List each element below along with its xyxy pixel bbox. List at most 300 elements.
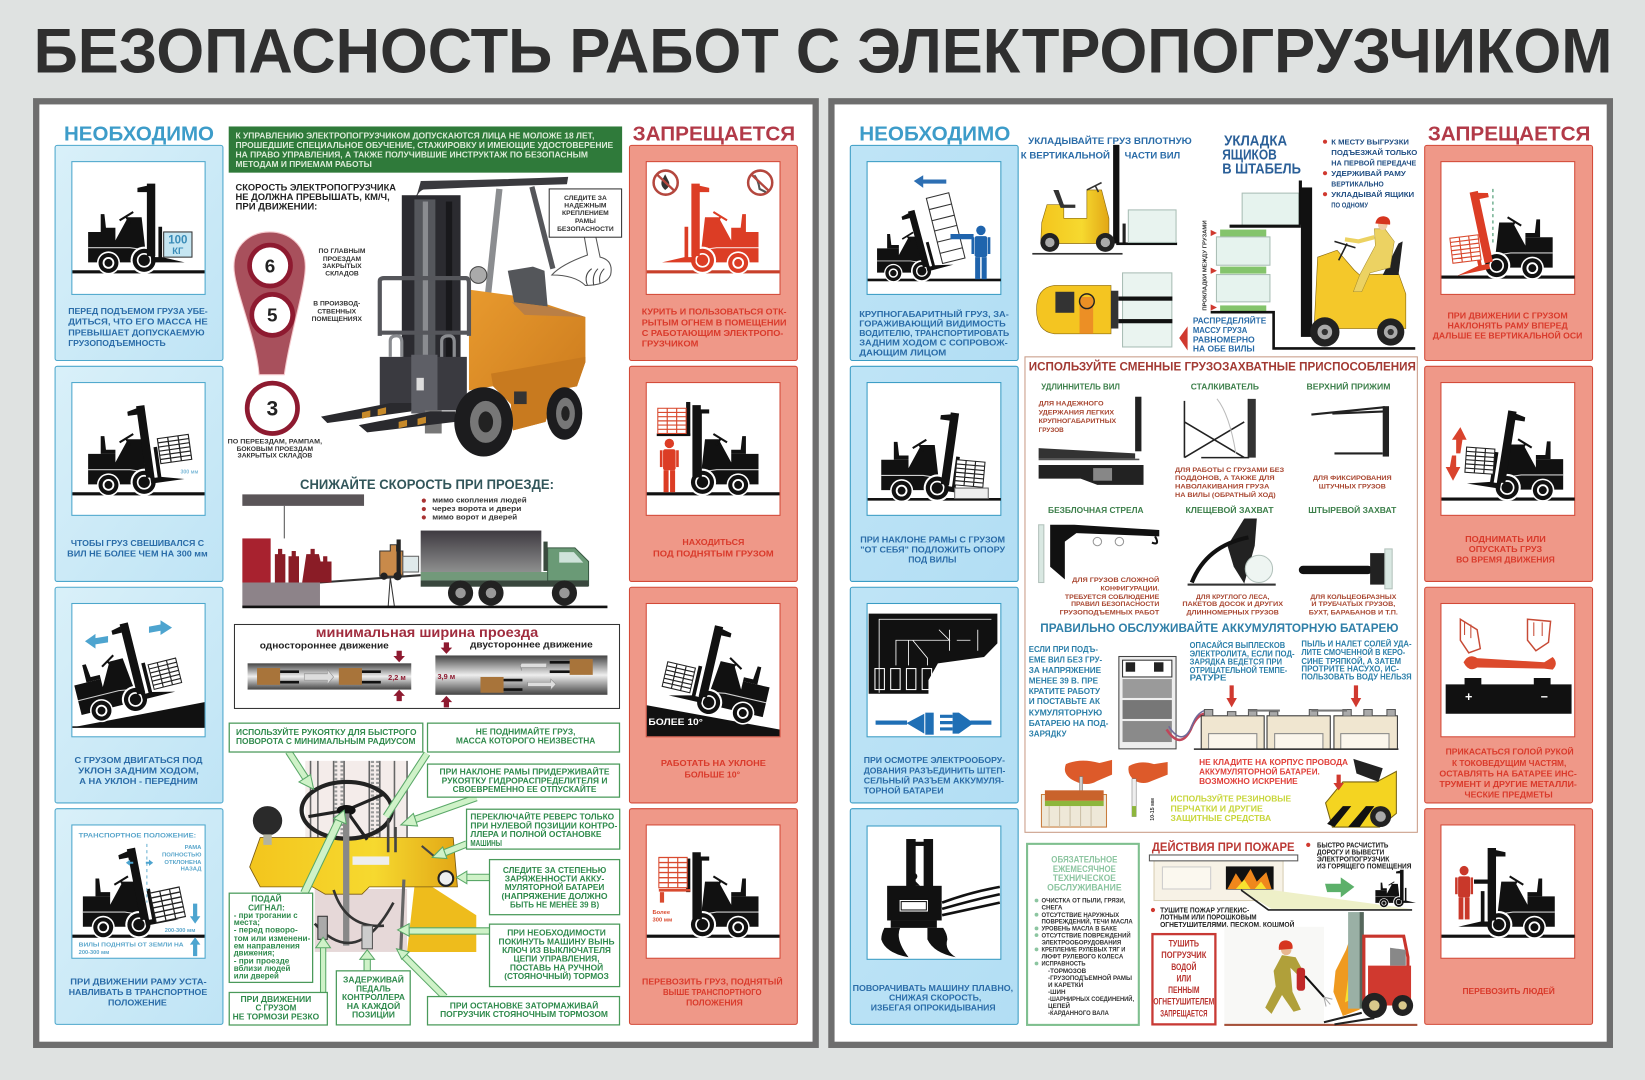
caption: ПРИ ДВИЖЕНИИ С ГРУЗОМ [1447,310,1568,320]
list: reduce speed places: мимо ворот и дверей [432,514,517,522]
list: maintenance items: ОТСУТСТВИЕ ПОВРЕЖДЕНИЙ [1041,930,1131,939]
list: maintenance items: ОЧИСТКА ОТ ПЫЛИ, ГРЯЗИ, [1041,898,1126,905]
text: low voltage note: ЕСЛИ ПРИ ПОДЪ- [1029,645,1098,654]
illustration: electrolyte level check: 10-15 мм [1150,798,1156,821]
list: maintenance items: И КАРЕТКИ [1048,982,1084,989]
illustration: yellow forklift top view [1037,273,1172,347]
icon: battery with wrench and hands [1446,619,1572,714]
list: maintenance items: -ШАРНИРНЫХ СОЕДИНЕНИЙ, [1048,994,1134,1003]
speed labels: ПРОЕЗДАМ [323,256,362,263]
icon: red forklift [647,184,779,274]
callout: unknown mass [428,723,619,752]
speed limit text: НЕ ДОЛЖНА ПРЕВЫШАТЬ, КМ/Ч, [236,192,390,202]
callout: parking brake: ПРИ ОСТАНОВКЕ ЗАТОРМАЖИВАЙ [450,999,598,1010]
transport position notes: РАМА [185,845,202,851]
callout: safety frame note: СЛЕДИТЕ ЗА [564,195,607,202]
attachment: pusher: СТАЛКИВАТЕЛЬ [1191,382,1259,391]
note: extinguishing [1151,908,1294,929]
card: touching live parts [1425,587,1593,803]
note: no wires on battery: АККУМУЛЯТОРНОЙ БАТАРЕИ. [1199,766,1320,777]
attachment: jib boom: БЕЗБЛОЧНАЯ СТРЕЛА [1048,506,1144,515]
heading: необходимо right: НЕОБХОДИМО [859,123,1010,146]
list: stacking rules: УДЕРЖИВАЙ РАМУ [1331,169,1406,178]
callout: leaving the machine: ПОКИНУТЬ МАШИНУ ВЫНЬ [499,937,615,946]
list: evacuate forklift: ДОРОГУ И ВЫВЕСТИ [1317,850,1384,857]
caption: ПОД ПОДНЯТЫМ ГРУЗОМ [653,548,774,558]
callout: leaving the machine: ЦЕПИ УПРАВЛЕНИЯ, [514,954,600,963]
callout: frame tilt: СВОЕВРЕМЕННО ЕЕ ОТПУСКАЙТЕ [453,783,597,794]
list: maintenance items: ЦЕПЕЙ [1048,1001,1071,1010]
caption: ВОДИТЕЛЮ, ТРАНСПОРТИРОВАТЬ [859,328,1009,338]
warning: water prohibited: ЗАПРЕЩАЕТСЯ [1160,1008,1207,1018]
caption: ДОВАНИЯ РАЗЪЕДИНИТЬ ШТЕП- [864,766,1005,776]
caption: СНИЖАЯ СКОРОСТЬ, [889,993,981,1003]
caption: ГРУЗЧИКОМ [642,338,698,348]
heading: reduce speed: СНИЖАЙТЕ СКОРОСТЬ ПРИ ПРОЕЗДЕ: [300,475,554,493]
chart: speed limit pin: 6 [265,256,275,277]
callout: steering handle: ИСПОЛЬЗУЙТЕ РУКОЯТКУ ДЛЯ БЫСТРОГО [236,726,417,737]
caption: БОЛЬШЕ 10° [685,770,741,780]
text: electrolyte note: ОПАСАЙСЯ ВЫПЛЕСКОВ [1190,641,1285,650]
caption: К ТОКОВЕДУЩИМ ЧАСТЯМ, [1452,758,1566,768]
speed limit text [236,182,397,211]
illustration: yellow battery truck [1326,759,1396,827]
attachment: pusher: НАВОЛАКИВАНИЯ ГРУЗА [1175,484,1270,491]
attachment: jib boom [1039,506,1160,617]
caption: НАВЛИВАТЬ В ТРАНСПОРТНОЕ [69,987,207,997]
caption: ОПУСКАТЬ ГРУЗ [1469,544,1543,554]
icon: no smoking [748,171,772,195]
caption [642,306,787,348]
icon: forklift on a slope [63,613,205,728]
text: low voltage note: МЕНЕЕ 39 В. ПРЕ [1029,676,1098,685]
list: stacking rules: К МЕСТУ ВЫГРУЗКИ [1331,137,1409,146]
attachment: top clamp: ШТУЧНЫХ ГРУЗОВ [1319,484,1386,491]
text: low voltage note: КУМУЛЯТОРНУЮ [1029,708,1102,717]
speed limit text: СКОРОСТЬ ЭЛЕКТРОПОГРУЗЧИКА [236,182,397,192]
card: smooth turning [850,809,1018,1024]
text: low voltage note: ЕМЕ ВИЛ БЕЗ ГРУ- [1029,655,1103,664]
icon: forklift with 100 kg load: КГ [172,246,184,257]
callout: reverse switching: ПРИ НУЛЕВОЙ ПОЗИЦИИ КОНТРО- [470,819,618,830]
note: extinguishing: ЛОТНЫМ ИЛИ ПОРОШКОВЫМ [1160,914,1257,921]
card: load overhang [55,366,223,581]
list: maintenance items: ИСПРАВНОСТЬ [1041,961,1086,968]
caption [68,306,208,348]
card: lifting while moving [1425,366,1593,581]
caption: СЕЛЬНЫЙ РАЗЪЕМ АККУМУЛЯ- [864,775,1004,786]
icon: forklift with load above transport height: Более [653,910,671,916]
chart: speed limit pin [234,232,305,433]
attachment: jib boom: ПРАВИЛ БЕЗОПАСНОСТИ [1071,601,1159,608]
text: place load close: УКЛАДЫВАЙТЕ ГРУЗ ВПЛОТНУЮ [1028,135,1192,146]
callout: sound signal: движения; [234,949,275,958]
callout: unknown mass: НЕ ПОДНИМАЙТЕ ГРУЗ, [476,726,575,737]
list: maintenance items: -КАРДАННОГО ВАЛА [1048,1010,1109,1017]
heading: запрещается left: ЗАПРЕЩАЕТСЯ [633,123,795,146]
caption: КРУПНОГАБАРИТНЫЙ ГРУЗ, ЗА- [859,308,1009,319]
text: dust note: ПЫЛЬ И НАЛЕТ СОЛЕЙ УДА- [1301,640,1412,649]
caption: ПЕРЕД ПОДЪЕМОМ ГРУЗА УБЕ- [68,306,208,316]
callout: steering handle: ПОВОРОТА С МИНИМАЛЬНЫМ РАДИУСОМ [236,737,416,746]
caption [864,755,1005,795]
attachment: top clamp: ВЕРХНИЙ ПРИЖИМ [1307,382,1391,391]
caption: ПЕРЕВОЗИТЬ ЛЮДЕЙ [1462,985,1555,996]
warning: water prohibited: ОГНЕТУШИТЕЛЕМ [1153,996,1214,1006]
caption [67,538,208,558]
transport position notes [79,833,202,956]
banner: admission rules: МЕТОДАМ И ПРИЕМАМ РАБОТЫ [236,159,372,169]
attachment: jib boom: ДЛЯ ГРУЗОВ СЛОЖНОЙ [1072,575,1159,584]
illustration: charging cabinet and batteries [1119,657,1398,750]
card: under raised load [629,366,797,581]
icon: forklift with 100 kg load [72,184,205,274]
caption: ЧТОБЫ ГРУЗ СВЕШИВАЛСЯ С [71,538,205,548]
note: distribute load: РАСПРЕДЕЛЯЙТЕ [1193,314,1267,325]
callout: reverse switching [467,809,620,849]
caption: ЧЕСКИЕ ПРЕДМЕТЫ [1465,790,1553,800]
text: dust note: ПРОТРИТЕ НАСУХО, ИС- [1301,665,1399,674]
callout: sound signal: СИГНАЛ: [248,904,285,913]
text: place load close [1021,135,1192,160]
icon: battery with wrench and hands: + [1465,690,1472,704]
icon: battery with wrench and hands: − [1541,690,1548,704]
card: disconnect battery [850,587,1018,803]
callout: controller pedal: НА КАЖДОЙ [347,1000,400,1011]
caption [661,758,766,780]
heading: fire actions: ДЕЙСТВИЯ ПРИ ПОЖАРЕ [1152,839,1295,854]
caption [1433,310,1582,340]
caption: ВО ВРЕМЯ ДВИЖЕНИЯ [1456,555,1555,565]
transport position notes: 200-300 мм [165,928,195,934]
card: no smoking [629,145,797,361]
panel: minimum aisle width: двустороннее движение [470,640,593,650]
speed labels: ПО ПЕРЕЕЗДАМ, РАМПАМ, [228,438,322,445]
banner: admission rules: ПРОШЕДШИЕ СПЕЦИАЛЬНОЕ ОБУЧЕНИЕ, СТАЖИРОВКУ И ИМЕЮЩИЕ УДОСТОВЕРЕНИЕ [236,140,614,150]
caption [1439,746,1577,800]
attachment: pusher: НА ВИЛЫ (ОБРАТНЫЙ ХОД) [1175,490,1276,499]
caption: ПРИ ОСМОТРЕ ЭЛЕКТРООБОРУ- [864,755,1005,765]
list: stacking rules: ПОДЪЕЗЖАЙ ТОЛЬКО [1331,148,1417,157]
caption: ПОВОРАЧИВАТЬ МАШИНУ ПЛАВНО, [853,983,1013,993]
caption: С РАБОТАЮЩИМ ЭЛЕКТРОПО- [642,328,783,338]
caption: ПОЛОЖЕНИЯ [686,997,743,1007]
note: distribute load: РАВНОМЕРНО [1193,334,1255,344]
caption: РАБОТАТЬ НА УКЛОНЕ [661,758,766,768]
caption [642,975,783,1007]
icon: forklift with overhanging load [72,401,205,496]
warning: water prohibited: ТУШИТЬ [1169,938,1199,948]
icon: mast tilted forward [1441,189,1575,280]
list: stacking rules: НА ПЕРВОЙ ПЕРЕДАЧЕ [1331,158,1416,167]
transport position notes: 200-300 мм [79,950,109,956]
illustration: yellow forklift side view [1032,145,1177,255]
text: electrolyte note: ЗАРЯДКА ВЕДЕТСЯ ПРИ [1190,657,1282,666]
list: maintenance items: -ГРУЗОПОДЪЕМНОЙ РАМЫ [1048,973,1132,982]
illustration: large orange forklift [321,177,585,457]
callout: controller pedal: КОНТРОЛЛЕРА [342,993,405,1002]
text: low voltage note: И ПОСТАВЬТЕ АК [1029,697,1100,706]
callout: sound signal: том или изменени- [234,934,311,943]
attachment: fork extender: ДЛЯ НАДЕЖНОГО [1039,401,1104,408]
attachment: fork extender: УДЛИННИТЕЛЬ ВИЛ [1041,382,1120,391]
attachment: fork extender [1039,382,1144,485]
heading: необходимо left: НЕОБХОДИМО [64,123,214,146]
text: electrolyte note: ОТРИЦАТЕЛЬНОЙ ТЕМПЕ- [1190,666,1288,675]
card: no carrying people [1425,809,1593,1024]
callout: sound signal: - при проезде [234,956,290,965]
icon: plug and socket [876,713,991,735]
caption: НАХОДИТЬСЯ [682,537,744,547]
speed labels: ЗАКРЫТЫХ СКЛАДОВ [238,453,312,460]
list: maintenance items: СНЕГА [1041,905,1063,912]
panel: monthly maintenance: ОБЯЗАТЕЛЬНОЕ [1051,855,1117,866]
attachment: pincer grab: ДЛИННОМЕРНЫХ ГРУЗОВ [1187,610,1279,617]
panel: monthly maintenance: ЕЖЕМЕСЯЧНОЕ [1053,864,1116,875]
attachment: pin grab: ШТЫРЕВОЙ ЗАХВАТ [1308,506,1396,515]
attachment: pincer grab: КЛЕЩЕВОЙ ЗАХВАТ [1185,506,1274,515]
caption: ПРЕВЫШАЕТ ДОПУСКАЕМУЮ [68,327,205,337]
callout: sound signal: места; [234,918,260,927]
list: evacuate forklift [1306,843,1411,871]
speed labels: ЗАКРЫТЫХ [322,263,362,270]
icon: forklift with overhanging load: 300 мм [180,469,199,475]
callout: battery charge: БЫТЬ НЕ МЕНЕЕ 39 В) [510,901,599,910]
list: maintenance items: ПОВРЕЖДЕНИЙ, ТЕЧИ МАСЛА [1041,917,1133,926]
text: low voltage note: БАТАРЕЮ НА ПОД- [1029,719,1109,728]
text: dust note: СИНЕ ТРЯПКОЙ, А ЗАТЕМ [1301,657,1401,666]
text: low voltage note [1029,645,1109,738]
road: one way [248,651,411,701]
caption: ТОРНОЙ БАТАРЕИ [864,784,943,795]
callout: leaving the machine: ПРИ НЕОБХОДИМОСТИ [507,929,606,938]
chart: speed limit pin: 5 [267,306,277,327]
icon: no fire [654,171,678,195]
caption: ДАЮЩИМ ЛИЦОМ [859,347,946,357]
icon: forklift with up-down arrows [1441,406,1575,502]
caption: ГРУЗОПОДЪЕМНОСТЬ [68,338,166,348]
caption: ПОЛОЖЕНИЕ [108,997,167,1007]
icon: forklift with 100 kg load: 100 [168,234,187,246]
caption: ВИЛ НЕ БОЛЕЕ ЧЕМ НА 300 мм [67,548,208,558]
callout: controller pedal: ЗАДЕРЖИВАЙ [343,973,404,984]
callout: no sudden braking [229,992,327,1025]
road: two way: 3,9 м [437,672,455,681]
list: maintenance items: ЭЛЕКТРООБОРУДОВАНИЯ [1041,940,1122,947]
callout: unknown mass: МАССА КОТОРОГО НЕИЗВЕСТНА [456,737,595,746]
text: dust note: ЛИТЕ СМОЧЕННОЙ В КЕРО- [1301,648,1406,657]
illustration: stacking with yellow forklift [1202,181,1415,348]
callout: safety frame note: РАМЫ [575,218,596,225]
note: use rubber gloves: ПЕРЧАТКИ И ДРУГИЕ [1170,803,1263,813]
attachment: pincer grab: ДЛЯ КРУГЛОГО ЛЕСА, [1196,594,1270,601]
caption: ПОД ВИЛЫ [908,555,956,565]
callout: no sudden braking: НЕ ТОРМОЗИ РЕЗКО [233,1013,320,1022]
list: stacking rules: ВЕРТИКАЛЬНО [1331,179,1384,188]
list: evacuate forklift: ИЗ ГОРЯЩЕГО ПОМЕЩЕНИЯ [1317,864,1411,871]
callout: steering handle [229,723,423,752]
panel: attachments and battery service [1025,357,1417,832]
panel: monthly maintenance: ОБСЛУЖИВАНИЕ [1047,883,1122,894]
arrows: callout pointers [289,751,490,997]
callout: frame tilt: РУКОЯТКУ ГИДРОРАСПРЕДЕЛИТЕЛЯ И [442,776,608,785]
list: reduce speed places: мимо скопления людей [432,497,527,505]
warning: water prohibited: ПЕННЫМ [1168,985,1200,995]
caption [1456,534,1555,565]
text: electrolyte note [1190,641,1295,683]
caption: КУРИТЬ И ПОЛЬЗОВАТЬСЯ ОТК- [642,306,787,316]
card: transport position [55,809,223,1024]
caption: С ГРУЗОМ ДВИГАТЬСЯ ПОД [74,755,203,765]
icon: forklift on steep slope: БОЛЕЕ 10° [648,717,703,727]
callout: controller pedal [336,971,410,1025]
callout: leaving the machine: (СТОЯНОЧНЫЙ) ТОРМОЗ [504,970,609,981]
callout: reverse switching: ПЕРЕКЛЮЧАЙТЕ РЕВЕРС ТОЛЬКО [470,811,615,822]
callout: sound signal [229,893,313,982]
text: electrolyte note: ЭЛЕКТРОЛИТА, ЕСЛИ ПОД- [1190,649,1295,659]
callout: frame tilt: ПРИ НАКЛОНЕ РАМЫ ПРИДЕРЖИВАЙТЕ [440,766,610,777]
note: distribute load: НА ОБЕ ВИЛЫ [1193,344,1255,354]
attachment: pincer grab: ПАКЕТОВ ДОСОК И ДРУГИХ [1182,601,1284,608]
heading: attachments: ИСПОЛЬЗУЙТЕ СМЕННЫЕ ГРУЗОЗАХВАТНЫЕ ПРИСПОСОБЛЕНИЯ [1029,358,1416,373]
road: one way: 2,2 м [388,673,406,682]
callout: battery charge: ЗАРЯЖЕННОСТИ АККУ- [505,875,605,884]
callout: safety frame note [549,189,622,285]
speed labels: ПОМЕЩЕНИЯХ [312,316,362,323]
note: use rubber gloves: ИСПОЛЬЗУЙТЕ РЕЗИНОВЫЕ [1170,792,1292,803]
list: stacking rules [1323,137,1417,209]
icon: forklift with support under load [868,411,1001,502]
caption [853,983,1013,1013]
callout: controller pedal: ПОЗИЦИИ [352,1011,395,1020]
callout: no sudden braking: ПРИ ДВИЖЕНИИ [241,995,311,1004]
text: dust note [1301,640,1412,682]
list: maintenance items: -ТОРМОЗОВ [1048,968,1087,975]
list: evacuate forklift: БЫСТРО РАСЧИСТИТЬ [1317,843,1388,850]
callout: no sudden braking: С ГРУЗОМ [255,1004,297,1013]
caption [859,308,1009,357]
caption [860,535,1006,565]
icon: person riding forks [1441,848,1575,939]
note: no wires on battery: НЕ КЛАДИТЕ НА КОРПУС ПРОВОДА [1199,757,1348,767]
card: slope over 10 degrees [629,587,797,803]
panel: minimum aisle width [234,624,619,708]
callout: reverse switching: МАШИНЫ [470,839,502,848]
warning: water prohibited: ВОДОЙ [1171,961,1196,972]
speed labels: СКЛАДОВ [325,271,359,278]
speed labels: БОКОВЫМ ПРОЕЗДАМ [237,446,314,453]
attachment: fork extender: ГРУЗОВ [1039,427,1064,434]
list: maintenance items: КРЕПЛЕНИЕ РУЛЕВЫХ ТЯГ И [1041,947,1126,954]
attachment: pusher [1175,382,1284,499]
speed labels: СТВЕННЫХ [317,308,357,315]
icon: circuit diagram [869,614,997,694]
illustration: yellow control panel [250,761,476,952]
note: use rubber gloves [1170,792,1292,823]
heading: stacking boxes: ЯЩИКОВ [1222,147,1277,163]
card: carrying load too high [629,809,797,1024]
callout: sound signal: вблизи людей [234,963,290,973]
callout: sound signal: ПОДАЙ [251,893,282,904]
panel: left poster [36,101,816,1045]
attachment: fork extender: УДЕРЖАНИЯ ЛЕГКИХ [1039,410,1115,417]
chart: speed limit pin: 3 [267,398,278,421]
list: evacuate forklift: ЭЛЕКТРОПОГРУЗЧИК [1317,857,1390,864]
transport position notes: НАЗАД [181,867,202,873]
callout: battery charge: СЛЕДИТЕ ЗА СТЕПЕНЬЮ [503,866,607,875]
attachment: pin grab [1299,506,1398,617]
text: place load close: ЧАСТИ ВИЛ [1125,150,1180,160]
caption: УКЛОН ЗАДНИМ ХОДОМ, [78,766,199,776]
heading: stacking boxes: УКЛАДКА [1224,133,1287,149]
callout: safety frame note: НАДЕЖНЫМ [564,202,607,209]
transport position notes: ОТКЛОНЕНА [164,860,202,866]
attachment: fork extender: КРУПНОГАБАРИТНЫХ [1039,418,1117,425]
callout: parking brake: ПОГРУЗЧИК СТОЯНОЧНЫМ ТОРМОЗОМ [440,1010,608,1019]
attachment: top clamp: ДЛЯ ФИКСИРОВАНИЯ [1313,475,1392,482]
attachment: pincer grab [1182,506,1284,617]
warning: water prohibited: ИЛИ [1176,973,1191,983]
caption: "ОТ СЕБЯ" ПОДЛОЖИТЬ ОПОРУ [860,545,1006,555]
heading: battery service: ПРАВИЛЬНО ОБСЛУЖИВАЙТЕ АККУМУЛЯТОРНУЮ БАТАРЕЮ [1040,620,1399,635]
note: no wires on battery [1199,757,1348,786]
heading: запрещается right: ЗАПРЕЩАЕТСЯ [1428,123,1590,146]
icon: forklift with load above transport height [647,852,779,939]
heading: stacking boxes: В ШТАБЕЛЬ [1222,162,1301,178]
caption [69,976,207,1007]
note: distribute load: МАССУ ГРУЗА [1193,325,1247,335]
caption: ТРУМЕНТ И ДРУГИЕ МЕТАЛЛИ- [1439,779,1577,789]
panel: monthly maintenance: ТЕХНИЧЕСКОЕ [1053,873,1116,884]
icon: forklift on steep slope [647,617,780,736]
caption: А НА УКЛОН - ПЕРЕДНИМ [79,776,198,786]
text: low voltage note: ЗА НАПРЯЖЕНИЕ [1029,666,1101,675]
illustration: stacking with yellow forklift: ПРОКЛАДКИ МЕЖДУ ГРУЗАМИ [1202,220,1208,311]
icon: forklift reversing with escort [868,175,1001,282]
text: low voltage note: ЗАРЯДКУ [1029,729,1068,738]
note: extinguishing: ТУШИТЕ ПОЖАР УГЛЕКИС- [1160,908,1250,915]
callout: safety frame note: КРЕПЛЕНИЕМ [562,210,609,217]
speed limit text: ПРИ ДВИЖЕНИИ: [236,201,317,211]
callout: battery charge: (НАПРЯЖЕНИЕ ДОЛЖНО [502,892,608,901]
callout: sound signal: - перед поворо- [234,926,298,935]
caption: ЗАДНИМ ХОДОМ С СОПРОВОЖ- [859,337,1008,347]
list: maintenance items: -ШИН [1048,989,1066,996]
speed labels: ПО ГЛАВНЫМ [319,248,366,255]
attachment: pin grab: ДЛЯ КОЛЬЦЕОБРАЗНЫХ [1310,594,1397,601]
list: reduce speed places [422,497,527,522]
callout: reverse switching: ЛЛЕРА И ПОЛНОЙ ОСТАНОВКЕ [470,828,602,839]
road: two way [435,642,607,707]
note: use rubber gloves: ЗАЩИТНЫЕ СРЕДСТВА [1170,813,1271,823]
panel: minimum aisle width: одностороннее движение [260,641,389,651]
panel: right poster [831,101,1610,1045]
attachment: pusher: ПОДДОНОВ, А ТАКЖЕ ДЛЯ [1175,475,1275,482]
icon: forklift in transport position [72,842,205,956]
caption: ПРИ НАКЛОНЕ РАМЫ С ГРУЗОМ [860,535,1005,545]
callout: controller pedal: ПЕДАЛЬ [356,984,391,993]
caption: НАКЛОНЯТЬ РАМУ ВПЕРЕД [1447,321,1568,331]
callout: leaving the machine [490,924,620,987]
transport position notes: ТРАНСПОРТНОЕ ПОЛОЖЕНИЕ: [79,833,196,840]
caption: ОСТАВЛЯТЬ НА БАТАРЕЕ ИНС- [1439,769,1577,779]
callout: frame tilt [428,764,619,797]
illustration: loading dock and truck [242,494,607,608]
callout: safety frame note: БЕЗОПАСНОСТИ [557,226,614,233]
panel: monthly maintenance [1027,844,1139,1025]
caption: ПРИКАСАТЬСЯ ГОЛОЙ РУКОЙ [1446,746,1574,757]
illustration: burning building [1149,855,1416,910]
